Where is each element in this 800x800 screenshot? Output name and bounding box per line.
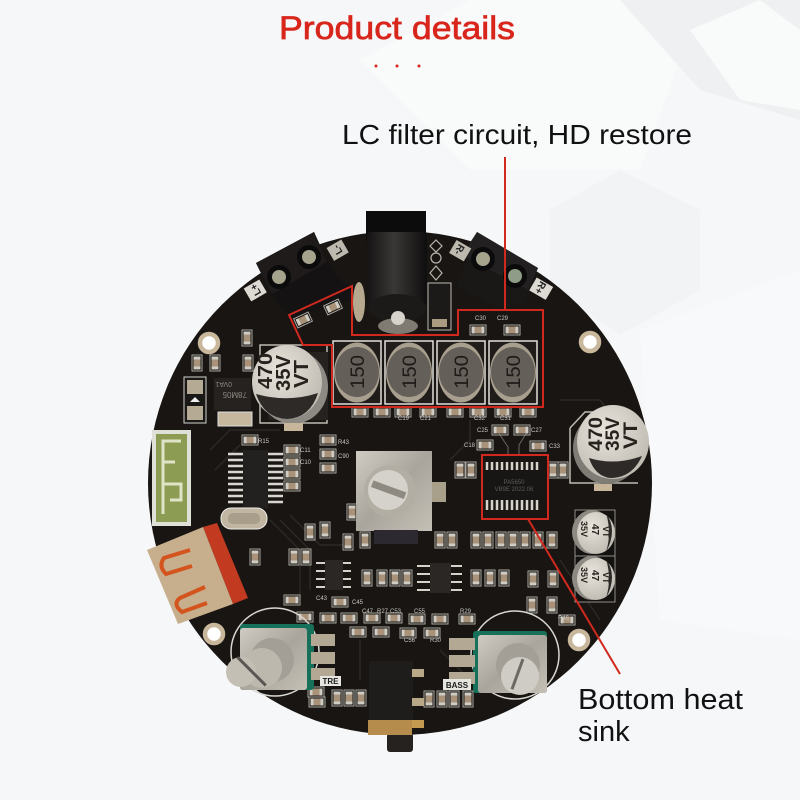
component reference labels: C29 [497, 316, 509, 322]
large capacitor left: 35V [273, 354, 295, 391]
main IC left [228, 450, 283, 508]
polarity symbol [430, 240, 442, 280]
large capacitor left: 470 [255, 353, 277, 389]
board disc [148, 231, 652, 735]
component reference labels: C47 [362, 609, 374, 615]
component reference labels: C43 [316, 596, 328, 602]
component reference labels: R30 [430, 638, 442, 644]
bluetooth module [152, 430, 191, 526]
power amplifier chip PA5650: VB9E 2022.06 [495, 487, 534, 493]
component reference labels: R29 [460, 609, 472, 615]
DC power jack [353, 211, 427, 334]
component reference labels: C31 [500, 416, 512, 422]
component reference labels: C19 [398, 416, 410, 422]
center rotary encoder [356, 451, 446, 544]
crystal [221, 508, 267, 529]
right terminal block: R- [451, 242, 466, 257]
callout: LC filter outline [289, 286, 543, 407]
component reference labels: R46 [558, 616, 570, 622]
component reference labels: C10 [300, 460, 312, 466]
power regulator 78M05 [214, 378, 252, 426]
USB socket [147, 523, 248, 624]
power regulator 78M05: 78M05 [222, 390, 247, 399]
component reference labels [258, 316, 570, 644]
label: LC filter circuit, HD restore: LC filter circuit, HD restore [342, 119, 692, 150]
power regulator 78M05: 0VA1 [215, 380, 232, 387]
component reference labels: C90 [338, 454, 350, 460]
component reference labels: R15 [258, 439, 270, 445]
component reference labels: R43 [338, 440, 350, 446]
treble potentiometer TRE [226, 608, 341, 696]
component reference labels: C53 [390, 609, 402, 615]
component reference labels: C25 [477, 428, 489, 434]
mounting holes [200, 333, 599, 649]
component reference labels: C56 [404, 638, 416, 644]
small capacitors 47 35V: 47 [589, 524, 600, 536]
leader line to heat sink [528, 519, 620, 674]
component reference labels: C32 [474, 416, 486, 422]
four inductors marked 150: 150 [348, 355, 369, 389]
small capacitors 47 35V: 35V [579, 521, 589, 537]
small capacitors 47 35V [572, 510, 615, 602]
small op-amp ICs [316, 560, 462, 593]
large capacitor right: VT [621, 422, 642, 449]
left terminal block [244, 232, 352, 318]
four inductors marked 150: 150 [400, 355, 421, 389]
faint traces [210, 400, 630, 680]
component reference labels: C27 [531, 428, 543, 434]
left terminal block: L- [331, 242, 345, 256]
label: Bottom heat sink: Bottom heat [578, 684, 743, 716]
large capacitor right: 470 [586, 417, 607, 451]
left terminal block: L+ [248, 281, 264, 297]
right terminal block: R+ [532, 279, 548, 296]
right terminal block [449, 232, 553, 310]
bass potentiometer BASS [443, 611, 559, 699]
surface mount components [192, 283, 575, 707]
small capacitors 47 35V: 35V [579, 567, 589, 583]
diode [184, 377, 206, 423]
three dots under title [374, 64, 420, 68]
component reference labels: R27 [377, 609, 389, 615]
label: Bottom heat sink: sink [578, 716, 630, 748]
four inductors marked 150: 150 [504, 355, 525, 389]
power amplifier chip PA5650 [485, 432, 542, 510]
title: Product details: Product details [279, 10, 515, 46]
component reference labels: C33 [549, 444, 561, 450]
small capacitors 47 35V: VT [601, 526, 611, 538]
small capacitors 47 35V: 47 [589, 570, 600, 582]
leader line to LC filter [504, 157, 506, 310]
component reference labels: C21 [420, 416, 432, 422]
four inductors marked 150 [333, 341, 537, 404]
component reference labels: C55 [414, 609, 426, 615]
audio jack [368, 661, 424, 752]
large capacitor right: 35V [603, 417, 624, 451]
power amplifier chip PA5650: PA5650 [504, 480, 525, 486]
component reference labels: C45 [352, 600, 364, 606]
small capacitors 47 35V: VT [601, 572, 611, 584]
component reference labels: C30 [475, 316, 487, 322]
component reference labels: C11 [300, 448, 311, 454]
circuit board [147, 211, 652, 752]
treble potentiometer TRE: TRE [322, 677, 339, 686]
bass potentiometer BASS: BASS [446, 681, 469, 690]
large capacitor right [570, 405, 649, 491]
large capacitor left: VT [291, 360, 313, 388]
large capacitor left [252, 345, 328, 431]
callout: chip outline [482, 455, 548, 519]
four inductors marked 150: 150 [452, 355, 473, 389]
component reference labels: C18 [464, 443, 476, 449]
